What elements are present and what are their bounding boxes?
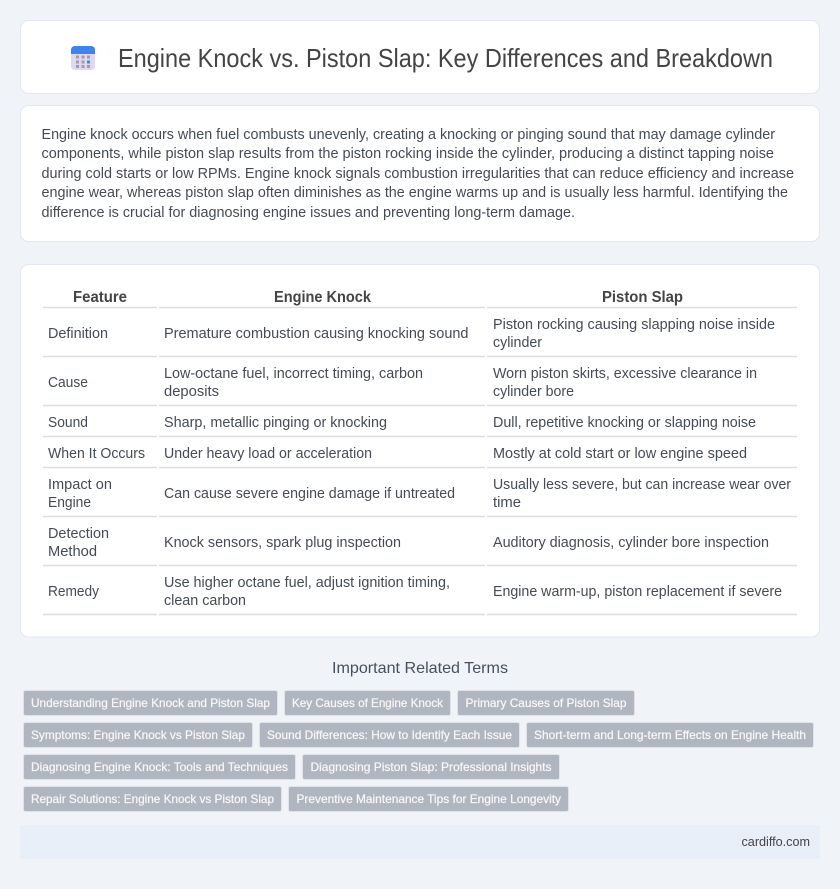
row: when it occurs: Under heavy load or acceleration xyxy=(164,446,372,462)
row: detection method: Knock sensors, spark plug inspection xyxy=(164,535,401,551)
intro text: during cold starts or low RPMs. Engine knock signals combustion irregularities that can reduce efficiency and increase xyxy=(42,166,794,182)
tag xyxy=(24,786,282,812)
table rules xyxy=(43,308,797,614)
tag: Diagnosing Engine Knock: Tools and Techniques xyxy=(31,760,288,774)
tag xyxy=(24,690,278,716)
tag: Understanding Engine Knock and Piston Slap xyxy=(31,696,270,710)
row: cause: Low-octane fuel, incorrect timing, carbon xyxy=(164,366,423,382)
table header row: Engine Knock xyxy=(274,289,371,306)
row: impact on engine: Impact on xyxy=(48,477,112,493)
footer bar xyxy=(20,825,820,859)
row: impact on engine xyxy=(48,477,791,511)
row: sound: Dull, repetitive knocking or slapping noise xyxy=(493,415,756,431)
intro text: engine wear, whereas piston slap often diminishes as the engine warms up and is usually less harmful. Identifying the xyxy=(42,185,788,201)
row: impact on engine: Usually less severe, but can increase wear over xyxy=(493,477,791,493)
tag: Sound Differences: How to Identify Each Issue xyxy=(267,728,512,742)
row: definition: Piston rocking causing slapping noise inside xyxy=(493,317,775,333)
row: when it occurs xyxy=(48,446,747,462)
row: cause: cylinder bore xyxy=(493,384,574,400)
row: remedy: Use higher octane fuel, adjust ignition timing, xyxy=(164,575,450,591)
row: sound: Sound xyxy=(48,415,88,431)
panel: comparison table xyxy=(20,264,820,637)
row: impact on engine: Engine xyxy=(48,495,91,511)
row: sound: Sharp, metallic pinging or knocking xyxy=(164,415,387,431)
intro text xyxy=(42,127,794,221)
tag xyxy=(288,786,568,812)
tag xyxy=(284,690,450,716)
row: detection method: Detection xyxy=(48,526,109,542)
panel: introduction xyxy=(20,106,820,242)
related terms tags xyxy=(24,690,814,812)
row: remedy: clean carbon xyxy=(164,593,246,609)
row: definition xyxy=(48,317,775,351)
tag: Diagnosing Piston Slap: Professional Insights xyxy=(310,760,552,774)
tag: Key Causes of Engine Knock xyxy=(292,696,444,710)
intro text: Engine knock occurs when fuel combusts unevenly, creating a knocking or pinging sound that may damage cylinder xyxy=(42,127,775,143)
row: definition: cylinder xyxy=(493,335,542,351)
tag xyxy=(526,722,814,748)
header panel xyxy=(20,20,820,94)
intro text: components, while piston slap results from the piston rocking inside the cylinder, producing a distinct tapping noise xyxy=(42,146,774,162)
table header row: Piston Slap xyxy=(602,289,683,306)
row: detection method: Method xyxy=(48,544,97,560)
row: definition: Definition xyxy=(48,326,108,342)
intro text: difference is crucial for diagnosing engine issues and preventing long-term damage. xyxy=(42,205,575,221)
tag xyxy=(24,754,296,780)
tag: Symptoms: Engine Knock vs Piston Slap xyxy=(31,728,245,742)
icon: calendar xyxy=(71,46,95,70)
table header row: Feature xyxy=(73,289,127,306)
row: detection method: Auditory diagnosis, cylinder bore inspection xyxy=(493,535,769,551)
row: cause: deposits xyxy=(164,384,219,400)
row: cause: Cause xyxy=(48,375,88,391)
footer source: cardiffo.com xyxy=(742,834,810,849)
row: cause xyxy=(48,366,757,400)
row: remedy: Engine warm-up, piston replacement if severe xyxy=(493,584,782,600)
tag xyxy=(458,690,634,716)
row: impact on engine: Can cause severe engine damage if untreated xyxy=(164,486,455,502)
row: when it occurs: Mostly at cold start or low engine speed xyxy=(493,446,747,462)
tag: Repair Solutions: Engine Knock vs Piston Slap xyxy=(31,792,274,806)
row: when it occurs: When It Occurs xyxy=(48,446,145,462)
heading: important related terms: Important Related Terms xyxy=(332,660,508,677)
row: remedy xyxy=(48,575,782,609)
row: definition: Premature combustion causing knocking sound xyxy=(164,326,468,342)
tag: Primary Causes of Piston Slap xyxy=(466,696,627,710)
row: detection method xyxy=(48,526,769,560)
tag: Preventive Maintenance Tips for Engine Longevity xyxy=(296,792,561,806)
tag xyxy=(24,722,252,748)
tag xyxy=(302,754,560,780)
tag: Short-term and Long-term Effects on Engine Health xyxy=(534,728,806,742)
title: Engine Knock vs. Piston Slap: Key Differences and Breakdown xyxy=(118,45,773,73)
row: cause: Worn piston skirts, excessive clearance in xyxy=(493,366,757,382)
tag xyxy=(260,722,520,748)
row: impact on engine: time xyxy=(493,495,521,511)
row: sound xyxy=(48,415,756,431)
row: remedy: Remedy xyxy=(48,584,100,600)
table header row xyxy=(73,289,683,306)
